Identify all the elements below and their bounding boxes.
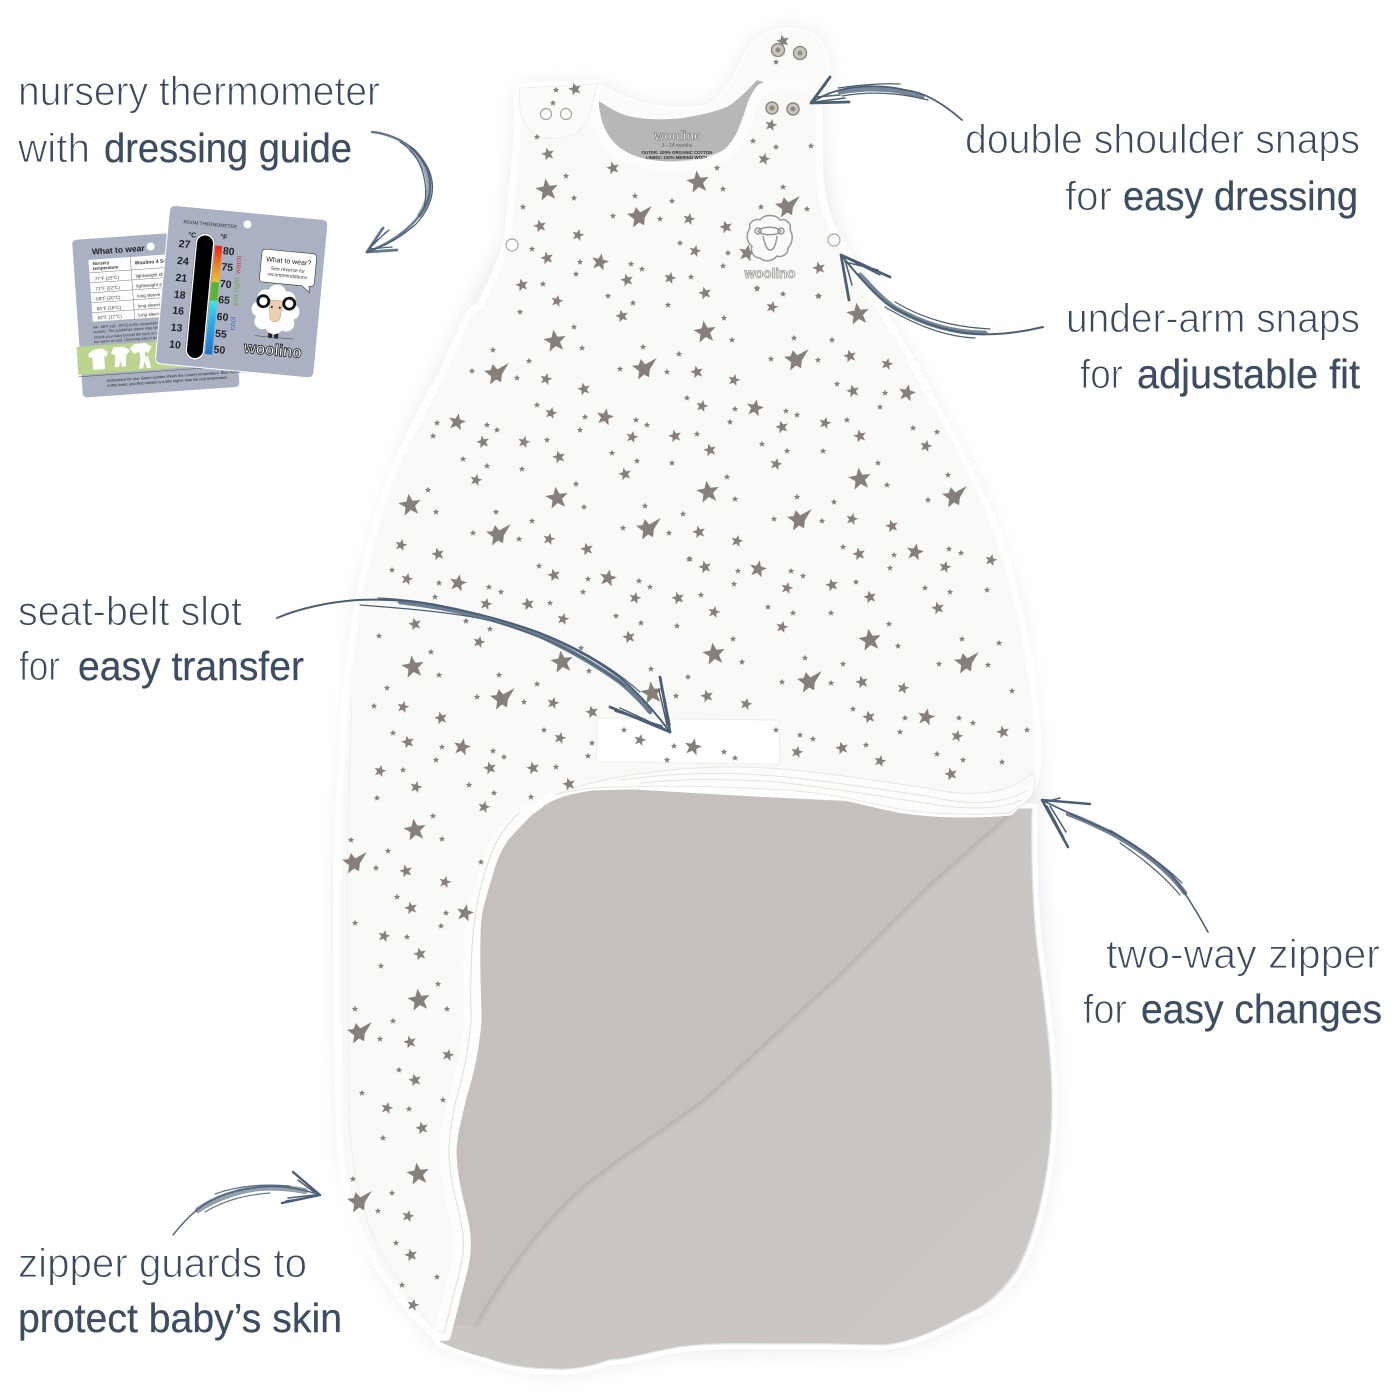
sleep bag garment — [335, 29, 1055, 1376]
thermometer strip: 50 — [213, 344, 226, 357]
arrow: two-way zipper — [1042, 798, 1208, 932]
thermometer cards — [69, 205, 328, 394]
label: seat-belt slot: for — [19, 643, 60, 689]
card: what to wear guide: long sleeve paj — [138, 310, 169, 318]
card: what to wear guide: 69°F (20°C) — [96, 295, 121, 301]
card: what to wear guide: Check your baby behind the neck or on — [94, 331, 160, 340]
thermometer strip: 16 — [172, 305, 185, 318]
card: what to wear guide: 71°F (22°C) — [95, 285, 120, 291]
neck label: woolino — [653, 129, 702, 143]
card: what to wear guide: What to wear — [92, 243, 146, 257]
arrow: under-arm snaps — [841, 255, 1043, 338]
label: seat-belt slot: easy transfer — [78, 643, 304, 689]
neck label — [642, 129, 712, 160]
card: what to wear guide: too warm or cool. Checking baby's hands — [94, 335, 164, 344]
speech bubble: See reverse for — [271, 266, 305, 275]
lining fold shadow — [474, 812, 1010, 1325]
thermometer strip: 60 — [216, 311, 229, 324]
card: what to wear guide: Woolino 4 Season — [135, 258, 178, 267]
label: nursery thermometer: with — [17, 125, 90, 171]
woolino logo: woolino — [242, 339, 302, 362]
thermometer strip: 10 — [169, 339, 182, 352]
arrow: seat-belt slot — [277, 598, 670, 732]
label: double shoulder snaps: double shoulder snaps — [965, 116, 1360, 162]
lining edge piping — [484, 812, 1052, 1369]
label: under-arm snaps: for — [1080, 351, 1123, 397]
label: double shoulder snaps — [965, 116, 1360, 219]
card: room thermometer — [155, 205, 328, 378]
thermometer strip: 70 — [219, 278, 232, 291]
label: two-way zipper: easy changes — [1141, 986, 1382, 1032]
label: two-way zipper — [1083, 931, 1382, 1032]
speech bubble — [259, 249, 317, 293]
thermometer strip: cool — [228, 316, 238, 331]
thermometer strip: 65 — [218, 294, 231, 307]
outer hem — [347, 700, 428, 1322]
label: nursery thermometer — [17, 68, 380, 171]
card: what to wear guide: 64 - 68°F (18 - 20°C) is the recommended — [93, 321, 164, 330]
card: what to wear guide: 63°F (17°C) — [97, 314, 122, 320]
neck label: 3 - 24 months — [662, 143, 693, 149]
back strap — [598, 29, 829, 150]
thermometer strip: °F — [220, 233, 228, 242]
neck binding — [595, 84, 815, 167]
thermometer strip: 21 — [175, 272, 188, 285]
card: what to wear guide — [69, 233, 247, 394]
thermometer strip: 13 — [170, 322, 183, 335]
thermometer strip: warm — [233, 255, 244, 275]
arrow: double shoulder snaps — [811, 77, 962, 120]
thermometer strip — [168, 229, 245, 364]
label: two-way zipper: for — [1083, 986, 1127, 1032]
label: double shoulder snaps: easy dressing — [1123, 173, 1358, 219]
label: seat-belt slot — [18, 588, 304, 689]
label: zipper guards — [18, 1240, 342, 1341]
thermometer strip: 24 — [177, 255, 189, 268]
zipper band left — [441, 806, 530, 1333]
label: under-arm snaps — [1066, 295, 1361, 397]
thermometer strip: 18 — [173, 289, 186, 302]
label: under-arm snaps: adjustable fit — [1137, 351, 1361, 397]
arrow: thermometer — [367, 132, 433, 252]
label: nursery thermometer: dressing guide — [104, 125, 352, 171]
label: double shoulder snaps: for — [1065, 173, 1112, 219]
card: what to wear guide: 65°F (18°C) — [97, 305, 122, 311]
thermometer strip: 55 — [215, 328, 227, 341]
speech bubble: recommendations — [267, 271, 308, 281]
card: what to wear guide: a little lower, and Red number is a little higher than the real temperature — [107, 376, 227, 388]
card: what to wear guide: temperature — [93, 264, 119, 271]
label: nursery thermometer: nursery thermometer — [18, 68, 380, 114]
card: what to wear guide: nursery. The guidelines above may vary — [93, 326, 161, 334]
front panel — [337, 82, 1038, 1338]
lining: grey fleece lower panel — [437, 785, 1055, 1372]
zipper band front — [555, 767, 1035, 814]
label: zipper guards: protect baby’s skin — [18, 1295, 342, 1341]
thermometer strip: 27 — [178, 238, 191, 251]
card: what to wear guide: Nursery — [93, 260, 110, 266]
star print — [342, 33, 1030, 1312]
label: under-arm snaps: under-arm snaps — [1066, 295, 1360, 341]
label: two-way zipper: two-way zipper — [1106, 931, 1380, 977]
sheep mascot — [249, 282, 302, 341]
label: seat-belt slot: seat-belt slot — [18, 588, 243, 634]
lining left of fold — [440, 785, 1010, 1325]
card: what to wear guide: lightweight shor — [136, 281, 169, 289]
thermometer strip: 75 — [221, 261, 234, 274]
speech bubble: What to wear? — [266, 256, 312, 268]
neck label: LINING: 100% MERINO WOOL — [646, 155, 709, 160]
arrow: zipper guards — [173, 1172, 320, 1235]
thermometer strip: just right — [230, 276, 242, 307]
card: what to wear guide: lightweight shor — [136, 271, 168, 279]
embroidered logo wordmark: woolino — [744, 266, 796, 281]
embroidered sheep logo — [744, 216, 796, 281]
snaps — [506, 44, 840, 251]
thermometer strip: 80 — [222, 245, 235, 258]
card: what to wear guide: long sleeve paj — [138, 301, 169, 309]
card: room thermometer: ROOM THERMOMETER — [183, 219, 238, 230]
seat-belt slot — [596, 718, 780, 764]
neck lining — [593, 80, 790, 161]
label: zipper guards: zipper guards to — [18, 1240, 307, 1286]
card: what to wear guide: long sleeve paj — [137, 291, 168, 299]
thermometer strip: °C — [188, 231, 196, 240]
soft drop shadow — [335, 29, 1055, 1376]
front shoulder flap — [519, 84, 598, 138]
card: what to wear guide: Instructions for use: Green number shows the nursery temperature. Blue number is — [107, 369, 246, 383]
neck label: OUTER: 100% ORGANIC COTTON — [642, 150, 712, 155]
card: what to wear guide: 77°F (25°C) — [95, 275, 120, 282]
